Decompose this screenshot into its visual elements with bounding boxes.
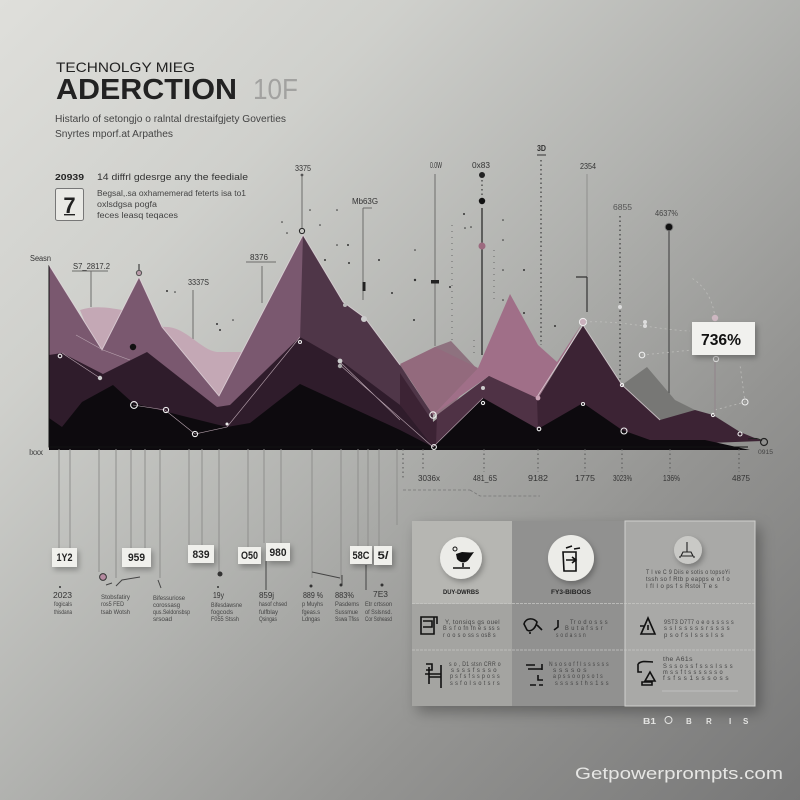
row icon: tools: s s f o I s o t s r s — [450, 681, 500, 687]
stat block with number 7: oxlsdgsa pogfa — [97, 200, 158, 209]
row icon: tools: p s f s f s s p o s s — [450, 674, 500, 680]
row icon: leaf: Tr o d o s s s — [570, 620, 608, 626]
stat block with number 7: Begsal,.sa oxhamemerad feterts isa to1 — [97, 189, 247, 198]
small footer icons: B1 — [643, 717, 657, 726]
lower text columns: Sussmue — [335, 609, 358, 616]
lower text columns: Qsingas — [259, 616, 278, 623]
row icon: stacked tools: a p s s o o p s o t s — [553, 674, 603, 680]
lower text columns: ros5 FED — [101, 601, 124, 608]
lower text columns: Stobsfatiry — [101, 594, 131, 601]
row icon: crane — [638, 657, 738, 691]
mid plum fragment — [436, 376, 538, 445]
plum mid band — [400, 325, 762, 447]
row icon: stacked tools: N s o s o f f I s s s s s s — [549, 662, 609, 668]
pink peak area — [433, 294, 583, 415]
lower text columns: of Sslsnsd. — [365, 609, 392, 616]
row icon: tools — [425, 662, 501, 688]
row icon: warning triangle: 9ST3 D7T7 o e o s s s s s — [664, 620, 734, 626]
axis labels: 3036x — [418, 474, 440, 483]
top leader lines and labels: 8376 — [250, 253, 269, 262]
row icon: stacked tools: s s s s s t h s 1 s s — [555, 681, 609, 687]
top leader lines and labels: S7_2817.2 — [73, 262, 111, 271]
lower text columns: Cor Soheasd — [365, 616, 392, 623]
lower data tags: O50 — [241, 550, 258, 562]
lower text columns: 7E3 — [373, 590, 389, 599]
icon: bird on perch: DUY-DWRBS — [443, 589, 480, 596]
lower text columns: fogcods — [211, 609, 234, 616]
black foreground — [49, 384, 750, 450]
stat block with number 7 — [55, 172, 248, 220]
text: third column intro: I fI I o ps f s Rstoi T e s — [646, 584, 718, 590]
top leader lines and labels: Mb63G — [352, 197, 378, 206]
stat block with number 7: 14 diffrl gdesrge any the feediale — [97, 172, 248, 182]
row icon: leaf: s o d a s s n — [556, 633, 586, 639]
row icon: warning triangle: p s o f s I s s s I s s — [664, 633, 724, 639]
row icon: device: Y, tonsiqs gs ouel — [445, 620, 500, 626]
stat block with number 7: 20939 — [55, 172, 84, 182]
inner data lines and nodes — [58, 228, 742, 449]
lower text columns: 883% — [335, 591, 354, 600]
panel: icon grid — [412, 521, 755, 706]
text: third column intro — [646, 570, 730, 590]
row icon: crane: m s s f t s s s s s s o — [663, 670, 723, 676]
axis labels: 3023% — [613, 474, 632, 483]
top leader lines and labels: 3337S — [188, 278, 209, 287]
top leader lines and labels: 4637% — [655, 209, 678, 218]
row icon: stacked tools — [526, 662, 609, 687]
intro text block: Histarlo of setongjo o ralntal drestaifgjety Goverties — [55, 114, 286, 125]
end marker: 0915 — [758, 449, 773, 456]
icon: document with arrow — [548, 535, 594, 596]
title: TECHNOLGY MIEG — [56, 59, 195, 75]
row icon: leaf: B u t a f s s r — [565, 626, 603, 632]
row icon: crane: S s s o s s f s s s I s s s — [663, 664, 733, 670]
lower text columns: srsoad — [153, 616, 172, 623]
lower text columns: p Muyhs — [302, 601, 324, 608]
main axis edge — [49, 265, 748, 447]
lower text columns — [53, 590, 392, 623]
axis labels: 481_6S — [473, 474, 497, 483]
top leader lines and labels: 3375 — [295, 164, 311, 173]
axis labels: Ixxx — [29, 448, 43, 457]
lower text columns: 19y — [213, 591, 224, 600]
axis labels: 9182 — [528, 474, 549, 483]
mauve ridge area — [49, 235, 303, 410]
small footer icons: B — [686, 717, 692, 726]
row icon: crane: f s f s s 1 s s s o s s — [663, 676, 729, 682]
area chart — [49, 228, 762, 450]
small footer icons: R — [706, 717, 712, 726]
lower text columns: fogicals — [54, 601, 73, 608]
small footer icons: S — [743, 717, 749, 726]
stat block with number 7: feces leasq teqaces — [97, 211, 178, 220]
stat block with number 7: 7 — [63, 193, 76, 218]
text: third column intro: T I ve C 9 Diis e sotis o topsoYi — [646, 570, 730, 576]
lower data tags: 959 — [128, 552, 145, 564]
row icon: warning triangle: s s I s s s s s r s s s s — [664, 626, 730, 632]
lower text columns: Pasdems — [335, 601, 360, 608]
lower text columns: tsab Wotsh — [101, 609, 130, 616]
axis labels — [29, 448, 751, 496]
intro text block: Snyrtes mporf.at Arpathes — [55, 129, 173, 140]
lower text columns: fulfblay — [259, 609, 279, 616]
text: third column intro: tssh so f Rtb p eapps e o f o — [646, 577, 730, 583]
end marker — [748, 438, 773, 456]
title: ADERCTION — [56, 74, 237, 106]
intro text block — [55, 114, 286, 140]
lower text columns: 859j — [259, 591, 274, 600]
gray mauve back area — [400, 341, 480, 420]
callout: 736% with connectors: 736% — [701, 332, 741, 349]
top leader lines and labels — [30, 144, 678, 447]
lower text columns: hasof chsed — [259, 601, 287, 608]
icon: lab stand — [674, 536, 702, 564]
axis labels: 136% — [663, 474, 680, 483]
callout: 736% with connectors — [585, 277, 755, 415]
row icon: tools: s s s s f s s s o — [451, 668, 497, 674]
panel column cells — [412, 521, 755, 706]
dark right face of main peak — [300, 235, 433, 445]
lower text columns: F055 Stssh — [211, 616, 239, 623]
lower text columns: Sswa Tfiss — [335, 616, 360, 623]
small footer icons — [643, 716, 749, 726]
lower data tags: 5/ — [378, 550, 388, 562]
icon: document with arrow: FY3-BIBOGS — [551, 589, 592, 596]
axis labels: 1775 — [575, 474, 596, 483]
muted pink front — [400, 347, 478, 415]
lower text columns: 889 % — [303, 591, 323, 600]
top leader lines and labels: 6855 — [613, 203, 633, 212]
row icon: crane: the A61s — [663, 657, 693, 663]
lower text columns: corossasg — [153, 602, 180, 609]
icon: bird on perch — [440, 537, 482, 596]
lower text columns: Ldngas — [302, 616, 321, 623]
row icon: warning triangle — [640, 618, 734, 639]
lower text columns: fgeas.s — [302, 609, 321, 616]
scattered particle dots — [166, 209, 556, 357]
top leader lines and labels: 2354 — [580, 162, 596, 171]
lower markers — [59, 572, 384, 588]
row icon: device: r o o s o ss s os8 s — [443, 633, 496, 639]
top leader lines and labels: 0x83 — [472, 161, 491, 170]
top leader lines and labels: Seasn — [30, 254, 51, 263]
back pale pink area — [80, 300, 246, 410]
title: 10F — [253, 74, 298, 106]
ridge highlight — [49, 235, 660, 420]
axis labels: 4875 — [732, 474, 751, 483]
top leader lines and labels: 3D — [537, 144, 546, 153]
lower text columns: Bifesdawsne — [211, 602, 242, 609]
row icon: leaf — [524, 619, 608, 639]
row icon: device — [421, 617, 500, 639]
watermark: Getpowerprompts.com — [575, 765, 783, 783]
title — [56, 59, 298, 106]
lower stems — [59, 449, 397, 590]
lower text columns: Etr crtsson — [365, 601, 392, 608]
lower data tags: 839 — [192, 549, 210, 561]
lower data tags: 980 — [270, 547, 286, 559]
row icon: stacked tools: s s s s o s — [553, 668, 587, 674]
lower data tags — [52, 543, 392, 567]
row icon: tools: s o , D1 stsn CRR o — [449, 662, 501, 668]
lower data tags: 58C — [352, 550, 370, 562]
gray back peak — [622, 367, 695, 422]
top leader lines and labels: 0.0W — [430, 161, 442, 170]
lower text columns: Bifessuriose — [153, 595, 185, 602]
lower text columns: qus.Seldonsbsp — [153, 609, 190, 616]
lower text columns: thisdana — [54, 609, 72, 616]
small footer icons: I — [729, 717, 731, 726]
plum lower area left — [49, 337, 433, 447]
row icon: device: B s f o fn fn e s ss s — [443, 626, 500, 632]
lower text columns: 2023 — [53, 591, 73, 600]
lower data tags: 1Y2 — [56, 552, 72, 564]
